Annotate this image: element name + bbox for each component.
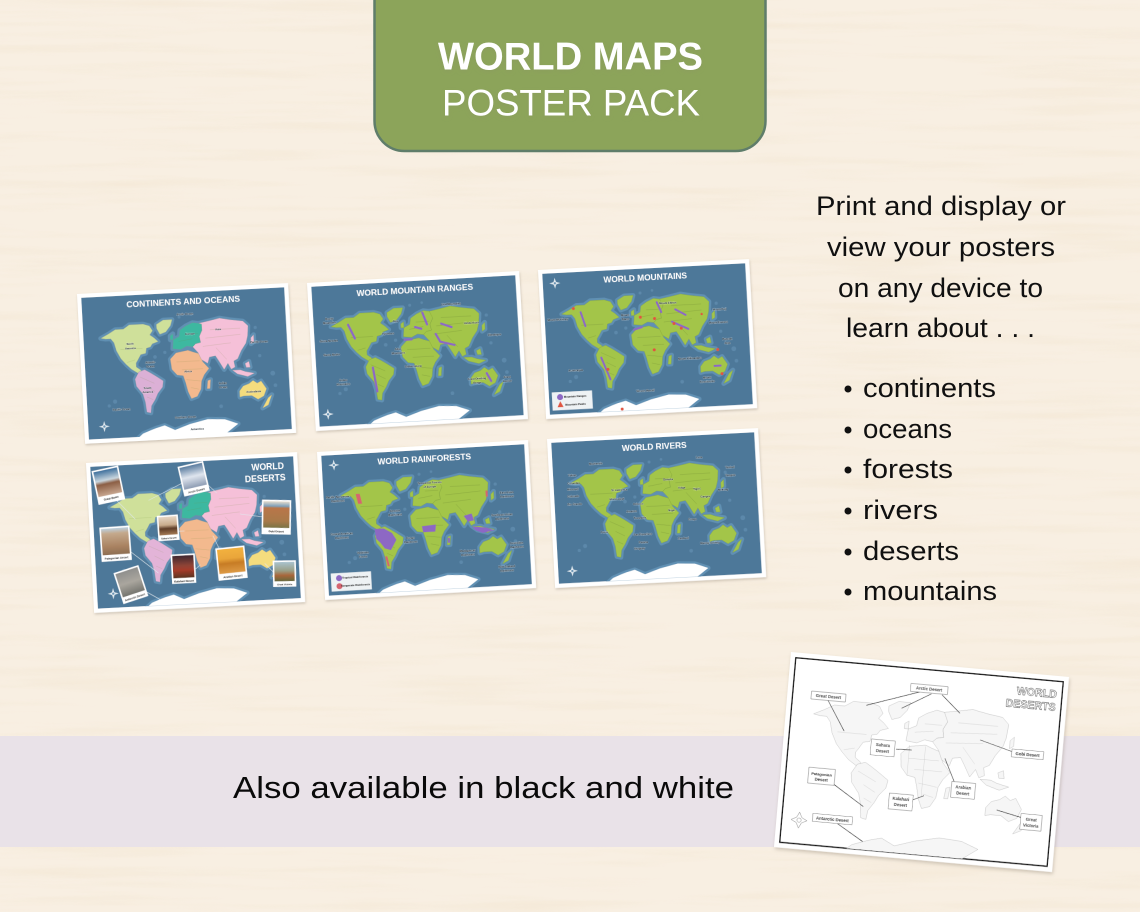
map labels: Rainforest: [495, 516, 509, 521]
map labels: South: [144, 386, 152, 390]
photo: great basin: Great Basin: [103, 494, 119, 502]
map labels: Mount Fuji: [713, 307, 727, 311]
topic list: rivers: [863, 495, 938, 525]
label: patagonian desert: [808, 767, 835, 785]
label: patagonian desert: Desert: [814, 777, 829, 783]
title: world maps: WORLD MAPS: [438, 36, 703, 78]
photo: gobi desert: Gobi Desert: [268, 529, 284, 534]
photo: patagonian desert: Patagonian Desert: [105, 555, 129, 561]
map labels: Australian: [510, 541, 524, 545]
map labels: Africa: [184, 369, 192, 374]
legend: [331, 571, 372, 592]
legend: Mountain Ranges: [564, 394, 587, 399]
map labels: Arctic Ocean: [176, 311, 194, 316]
poster: black and white world deserts: [774, 652, 1069, 872]
map labels: Rainforest: [500, 494, 514, 499]
map labels: Mountains: [391, 351, 406, 355]
label: kalahari desert: Desert: [894, 802, 908, 808]
map labels: Forest: [359, 554, 367, 559]
photo: great victoria: Great Victoria: [277, 583, 293, 586]
compass: [322, 408, 334, 420]
map labels: Rainforest: [461, 552, 475, 557]
band caption: Also available in black and white: [233, 770, 734, 805]
map labels: Amazon: [389, 508, 401, 513]
map labels: Colorado: [567, 494, 580, 499]
map labels: Range: [473, 381, 482, 385]
topic list: [844, 373, 997, 606]
map labels: New Zealand: [498, 564, 516, 569]
map labels: Mount Kilimanjaro: [678, 355, 702, 361]
map labels: Indian: [219, 381, 227, 385]
map labels: Congo: [406, 536, 415, 540]
photo: great basin: [91, 466, 125, 505]
label: great desert: Great Desert: [816, 693, 842, 700]
label: great victoria: [1020, 813, 1042, 831]
intro text: [816, 191, 1066, 343]
compass: [549, 277, 561, 289]
map labels: Rainforest: [510, 545, 524, 549]
label: great victoria: Great: [1026, 817, 1038, 823]
poster title: WORLD MOUNTAIN RANGES: [356, 282, 474, 298]
legend: Temperate Rainforests: [341, 582, 371, 588]
topic list: forests: [863, 454, 953, 484]
map labels: Niger: [668, 508, 676, 512]
map labels: Valdivian: [357, 550, 369, 555]
map labels: Southeast Asian: [491, 512, 513, 517]
map labels: Ganges: [700, 494, 711, 499]
map labels: Andes: [339, 378, 348, 383]
map labels: Amazon: [626, 509, 637, 514]
map labels: Sierra Madre: [323, 352, 340, 357]
poster title: WORLD: [251, 461, 284, 473]
tropical rainforests: [374, 512, 495, 551]
map labels: Atlas: [395, 347, 402, 351]
map labels: Aconcagua: [568, 368, 584, 372]
map labels: Barrier: [503, 379, 513, 383]
map labels: Rocky: [325, 317, 334, 321]
poster: world deserts: [86, 452, 305, 613]
map labels: Australasia: [246, 389, 262, 394]
poster title: DESERTS: [245, 472, 286, 484]
label: sahara desert: Desert: [876, 748, 890, 754]
label: arctic desert: Arctic Desert: [916, 685, 943, 693]
continents coloured: [100, 315, 274, 441]
poster title: WORLD RAINFORESTS: [377, 451, 472, 467]
photo: sahara desert: [157, 514, 180, 541]
label: patagonian desert: Patagonian: [811, 772, 833, 778]
poster: continents and oceans: [77, 283, 296, 444]
map labels: Murray-Darling: [700, 540, 720, 545]
map labels: Congo: [688, 517, 697, 522]
map labels: Europe: [185, 332, 195, 336]
leader lines: [115, 478, 275, 601]
label: antarctic desert: [812, 813, 853, 825]
label: great victoria: Victoria: [1023, 822, 1039, 829]
map labels: Mississippi: [609, 497, 624, 501]
map labels: Drakensberg: [405, 364, 422, 369]
label: arabian desert: [950, 781, 976, 799]
poster title: DESERTS: [1005, 698, 1056, 714]
map labels: Yenisei: [725, 465, 735, 469]
map labels: Sao Francisco: [634, 532, 653, 536]
poster title: [244, 461, 286, 484]
compass: [567, 565, 578, 577]
map labels: Antarctica: [190, 426, 204, 431]
label: antarctic desert: Antarctic Desert: [816, 815, 850, 823]
poster: world rainforests: [317, 440, 536, 600]
legend: [552, 390, 593, 411]
map labels: Mekong: [718, 487, 729, 492]
label: arctic desert: [910, 683, 948, 695]
compass: [790, 811, 808, 829]
map labels: Purus: [601, 530, 609, 534]
label: gobi desert: Gobi Desert: [1015, 751, 1040, 758]
compass: [107, 588, 119, 600]
label: kalahari desert: Kalahari: [892, 796, 909, 802]
map labels: Temperate Forests: [417, 480, 442, 485]
label: arabian desert: Arabian: [955, 784, 972, 791]
map labels: [326, 476, 525, 583]
map labels: Southern Ocean: [175, 415, 196, 420]
map labels: Parana: [639, 540, 648, 544]
legend: Tropical Rainforests: [342, 574, 369, 580]
map labels: Mount: [703, 375, 711, 380]
topic list: oceans: [863, 414, 952, 444]
map labels: St Lawrence: [611, 487, 628, 492]
legend: Mountain Peaks: [565, 402, 586, 407]
map labels: Orinoco: [633, 502, 644, 506]
compass: [328, 459, 340, 471]
photo: kalahari desert: Kalahari Desert: [174, 578, 194, 583]
map labels: Mackenzie: [589, 461, 603, 466]
poster title: WORLD: [1016, 685, 1058, 701]
map labels: Blanc: [622, 317, 630, 321]
map labels: Vinson Massif: [636, 388, 655, 393]
photo: kalahari desert: [171, 553, 196, 584]
poster title: WORLD RIVERS: [622, 440, 687, 453]
map labels: Missouri: [567, 487, 579, 491]
map labels: Puncak: [722, 337, 733, 341]
poster: world mountains: [538, 259, 757, 419]
intro text: on any device to: [838, 273, 1043, 303]
photo: sahara desert: Sahara Desert: [161, 536, 177, 540]
map labels: Rainforest: [500, 568, 514, 573]
label: kalahari desert: [888, 793, 913, 811]
map labels: North: [126, 342, 134, 346]
map labels: Ocean: [146, 364, 155, 369]
map labels: Yukon: [568, 473, 577, 477]
photo: gobi desert: [262, 500, 291, 535]
map labels: Ural Mountains: [441, 301, 462, 307]
map labels: [318, 299, 513, 393]
map labels: Yangtze: [725, 473, 736, 477]
photo: arabian desert: [215, 545, 248, 581]
map labels: Mount Elbrus: [659, 300, 677, 305]
poster: world mountain ranges: [307, 271, 528, 431]
map labels: Rio Grande: [567, 502, 583, 507]
map labels: [547, 297, 735, 398]
title panel: [374, 0, 766, 151]
map labels: Pacific Temperate: [326, 494, 350, 500]
map labels: Mount Everest: [709, 320, 728, 325]
map labels: Tocantins: [634, 516, 647, 520]
subtitle: poster pack: POSTER PACK: [442, 82, 700, 124]
map labels: Hindu Kush: [464, 320, 480, 325]
mountain ranges: [580, 299, 721, 381]
map labels: Great: [504, 375, 511, 379]
map labels: Mountains: [337, 382, 351, 387]
map labels: Mount: [621, 313, 629, 317]
topic list: continents: [863, 373, 996, 403]
map labels: Central American: [330, 531, 353, 536]
poster title: WORLD MOUNTAINS: [603, 270, 688, 285]
map labels: Alps: [392, 319, 399, 323]
map labels: Columbia: [567, 481, 580, 485]
map labels: Lena: [696, 455, 703, 460]
map labels: America: [125, 346, 136, 350]
map labels: Rainforest: [388, 512, 402, 517]
label: arabian desert: Desert: [956, 790, 970, 797]
map labels: Ocean: [219, 385, 228, 389]
map labels: [565, 454, 740, 554]
map labels: of Europe: [423, 484, 437, 489]
photo: antarctic desert: [113, 565, 148, 604]
map labels: Danube: [663, 477, 674, 481]
map labels: [108, 308, 273, 435]
photo: arctic desert: [178, 461, 210, 497]
map labels: Volga: [678, 485, 686, 490]
topic list: mountains: [863, 576, 997, 606]
photo: great victoria: [273, 560, 296, 587]
label: gobi desert: [1011, 749, 1044, 760]
map labels: Asia: [215, 327, 221, 331]
lilac band: [0, 736, 1140, 847]
map labels: Rainforest: [404, 540, 418, 544]
photo: antarctic desert: Antarctic Desert: [124, 592, 146, 602]
map labels: America: [142, 390, 154, 394]
map labels: Pyrenees: [382, 331, 395, 336]
map labels: Mountains: [323, 320, 337, 325]
poster: world rivers: [547, 428, 766, 588]
map labels: Zambezi: [678, 536, 689, 540]
map labels: Rainforest: [335, 535, 349, 540]
label: great desert: [811, 691, 846, 702]
intro text: view your posters: [827, 232, 1055, 262]
photo: arabian desert: Arabian Desert: [223, 573, 243, 579]
map labels: Atlantic: [145, 360, 156, 365]
map labels: Kosciuszko: [700, 379, 715, 384]
compass: [99, 421, 110, 432]
intro text: learn about . . .: [846, 313, 1035, 343]
label: sahara desert: [870, 739, 895, 757]
map labels: Himalayas: [488, 332, 502, 337]
map labels: Pacific Ocean: [250, 339, 268, 344]
map labels: Madagascar: [460, 548, 476, 553]
intro text: Print and display or: [816, 191, 1066, 221]
map labels: Mount McKinley: [547, 317, 569, 322]
temperate rainforests: [356, 486, 491, 568]
topic list: deserts: [863, 536, 959, 566]
map labels: Rainforest: [331, 499, 345, 503]
mountain ranges: [348, 309, 491, 393]
map labels: Uruguay: [634, 546, 646, 551]
map labels: Pacific Ocean: [113, 407, 131, 412]
label: sahara desert: Sahara: [876, 742, 891, 748]
map labels: Sierra Nevada: [320, 338, 338, 343]
leader lines: [816, 683, 1031, 856]
map labels: East Asian: [500, 490, 514, 495]
photo: arctic desert: Arctic Desert: [188, 487, 205, 494]
poster title: [1005, 684, 1058, 714]
mountain peaks: [572, 299, 725, 413]
map labels: Jaya: [724, 341, 731, 345]
map labels: Tigris: [693, 487, 701, 491]
photo: patagonian desert: [99, 526, 132, 562]
poster title: CONTINENTS AND OCEANS: [126, 294, 241, 310]
map labels: Great Dividing: [468, 376, 487, 381]
